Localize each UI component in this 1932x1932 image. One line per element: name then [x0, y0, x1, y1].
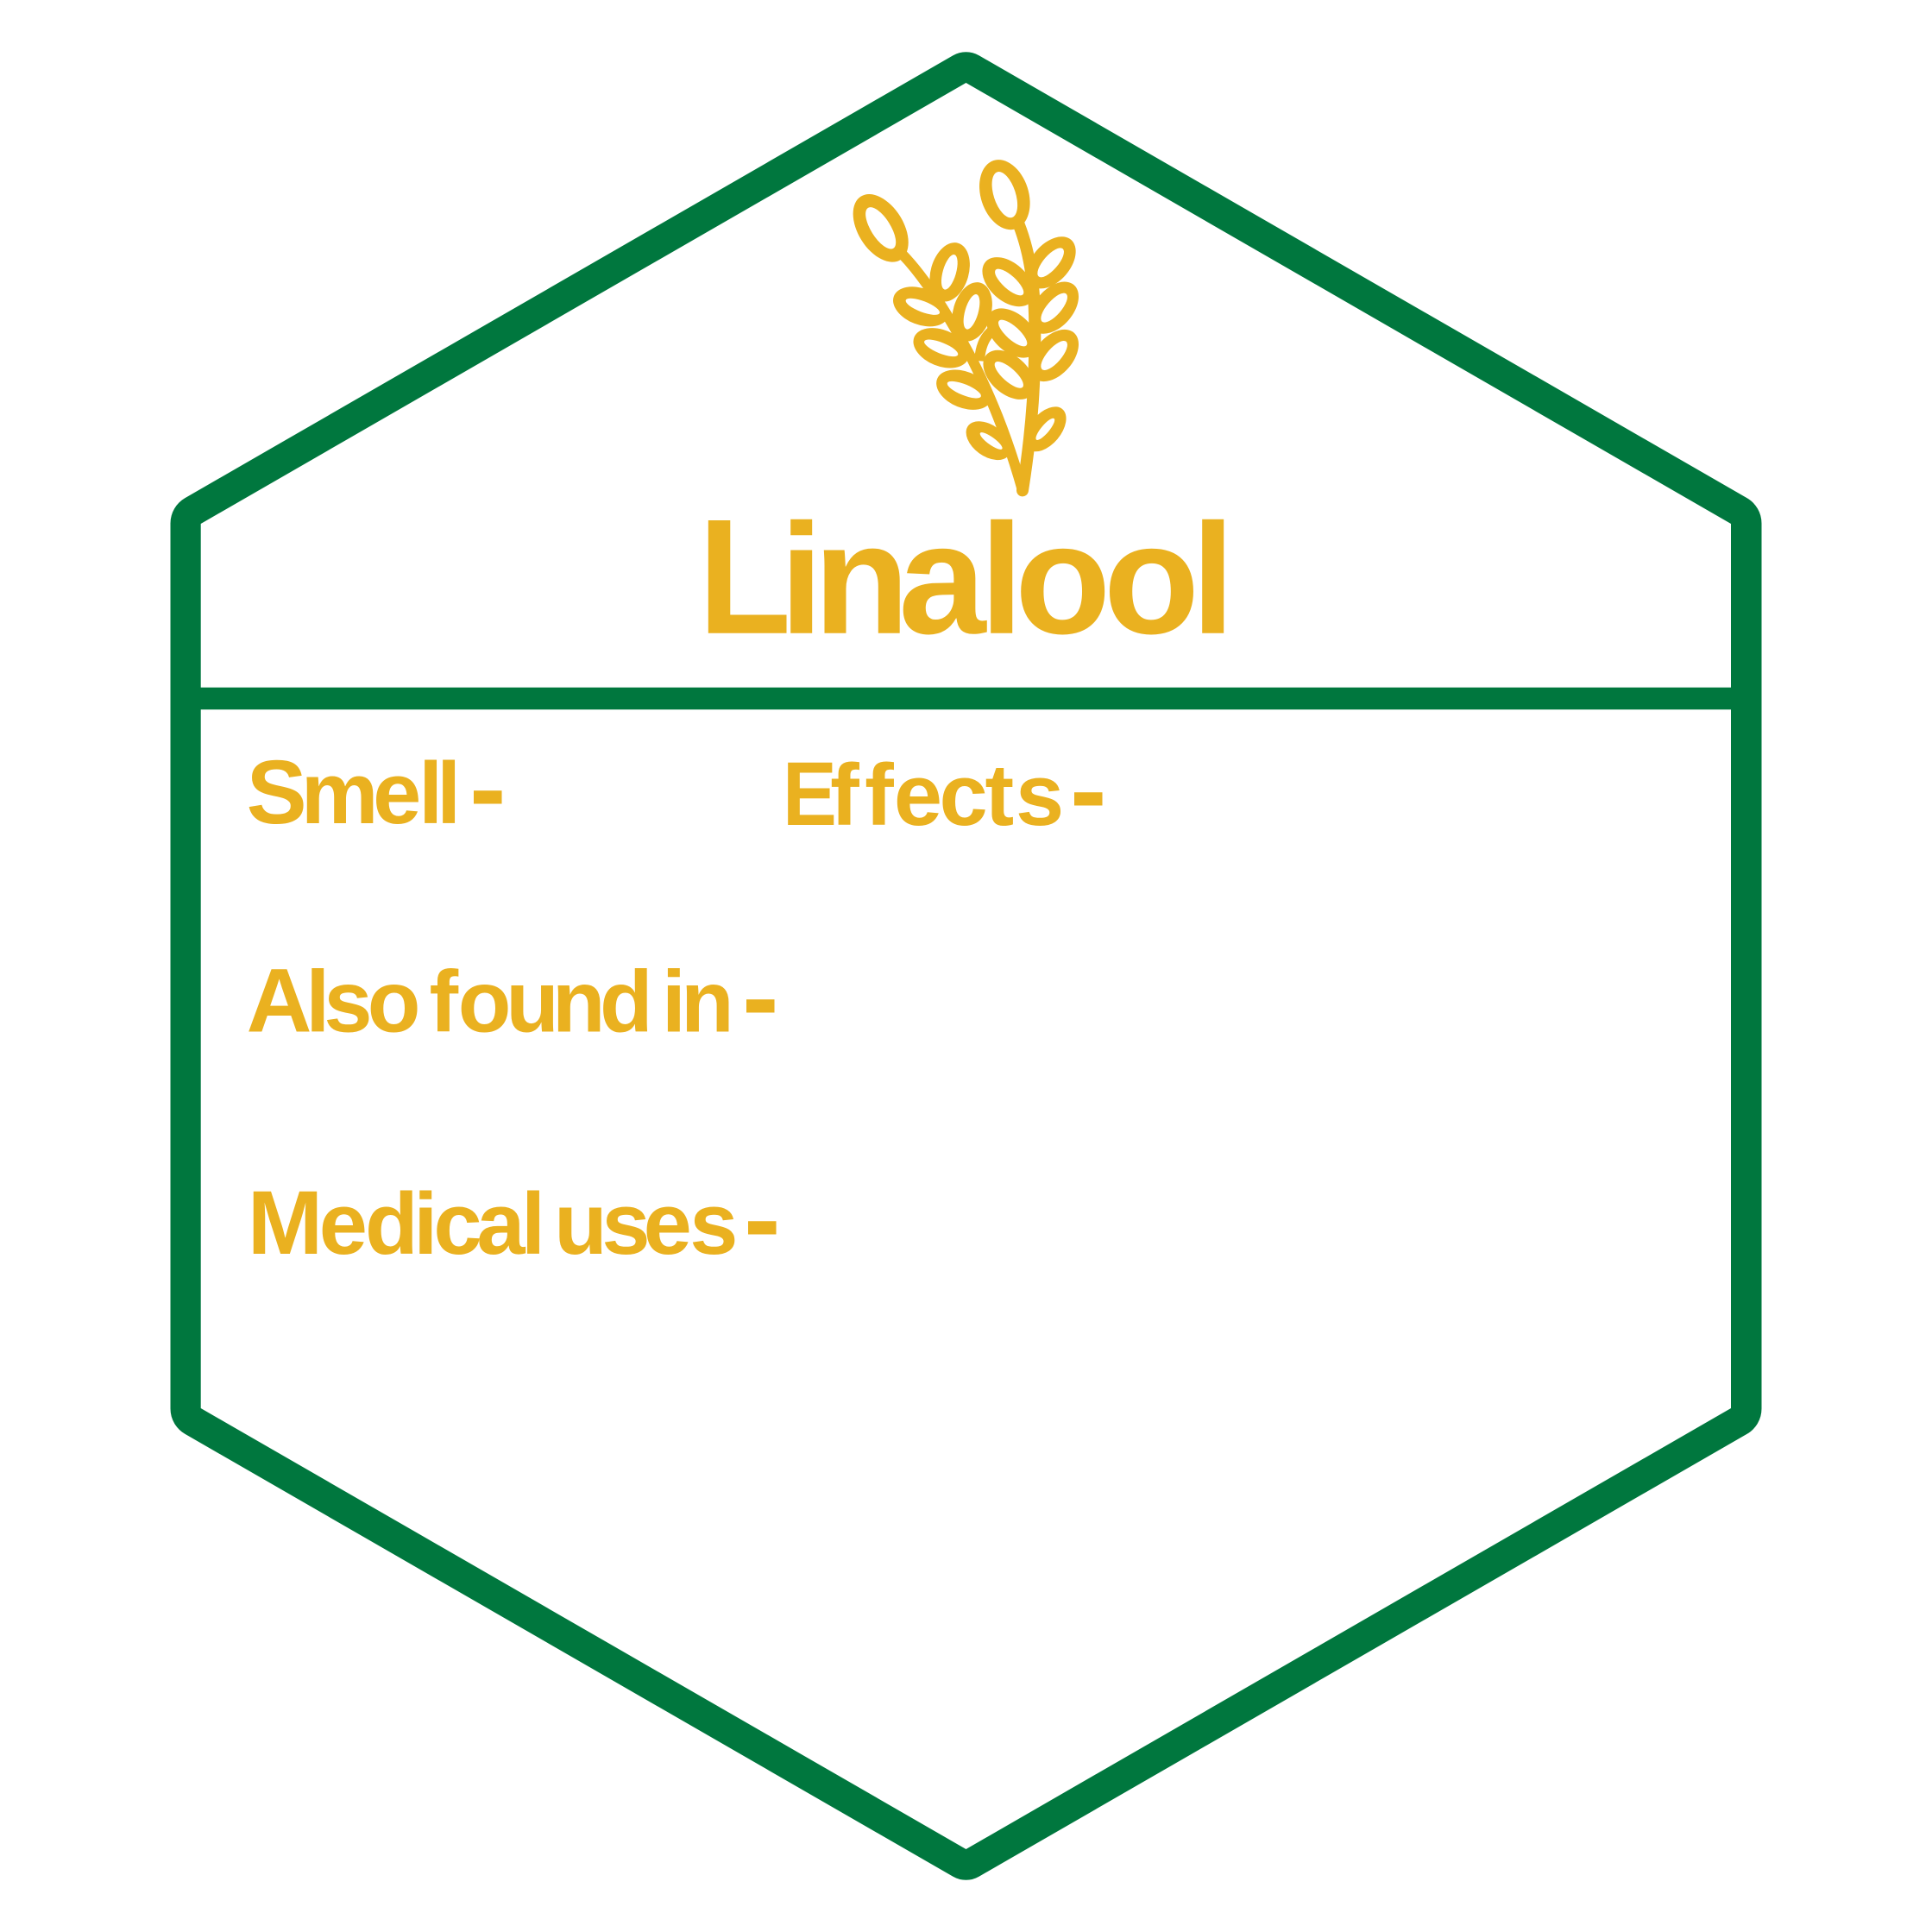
- label: effects: E: [783, 744, 837, 845]
- label: smell: mell: [301, 746, 461, 842]
- label: also found in: A: [247, 951, 312, 1052]
- title: L: [698, 485, 791, 668]
- title: inalool: [780, 491, 1235, 667]
- label: also found in: -: [742, 935, 779, 1059]
- label: smell: S: [247, 742, 307, 843]
- icon: plant sprig: [841, 153, 1088, 490]
- label: effects: ffects: [830, 747, 1064, 844]
- label: effects: [783, 728, 1107, 852]
- label: also found in: lso found in: [305, 954, 734, 1051]
- label: medical uses: -: [744, 1157, 781, 1281]
- label: medical uses: edical uses: [319, 1176, 738, 1273]
- divider bar: [200, 688, 1732, 709]
- panel: hexagon frame: [171, 52, 1762, 1880]
- label: smell: -: [469, 727, 507, 850]
- label: medical uses: M: [248, 1173, 323, 1274]
- label: effects: -: [1070, 728, 1107, 852]
